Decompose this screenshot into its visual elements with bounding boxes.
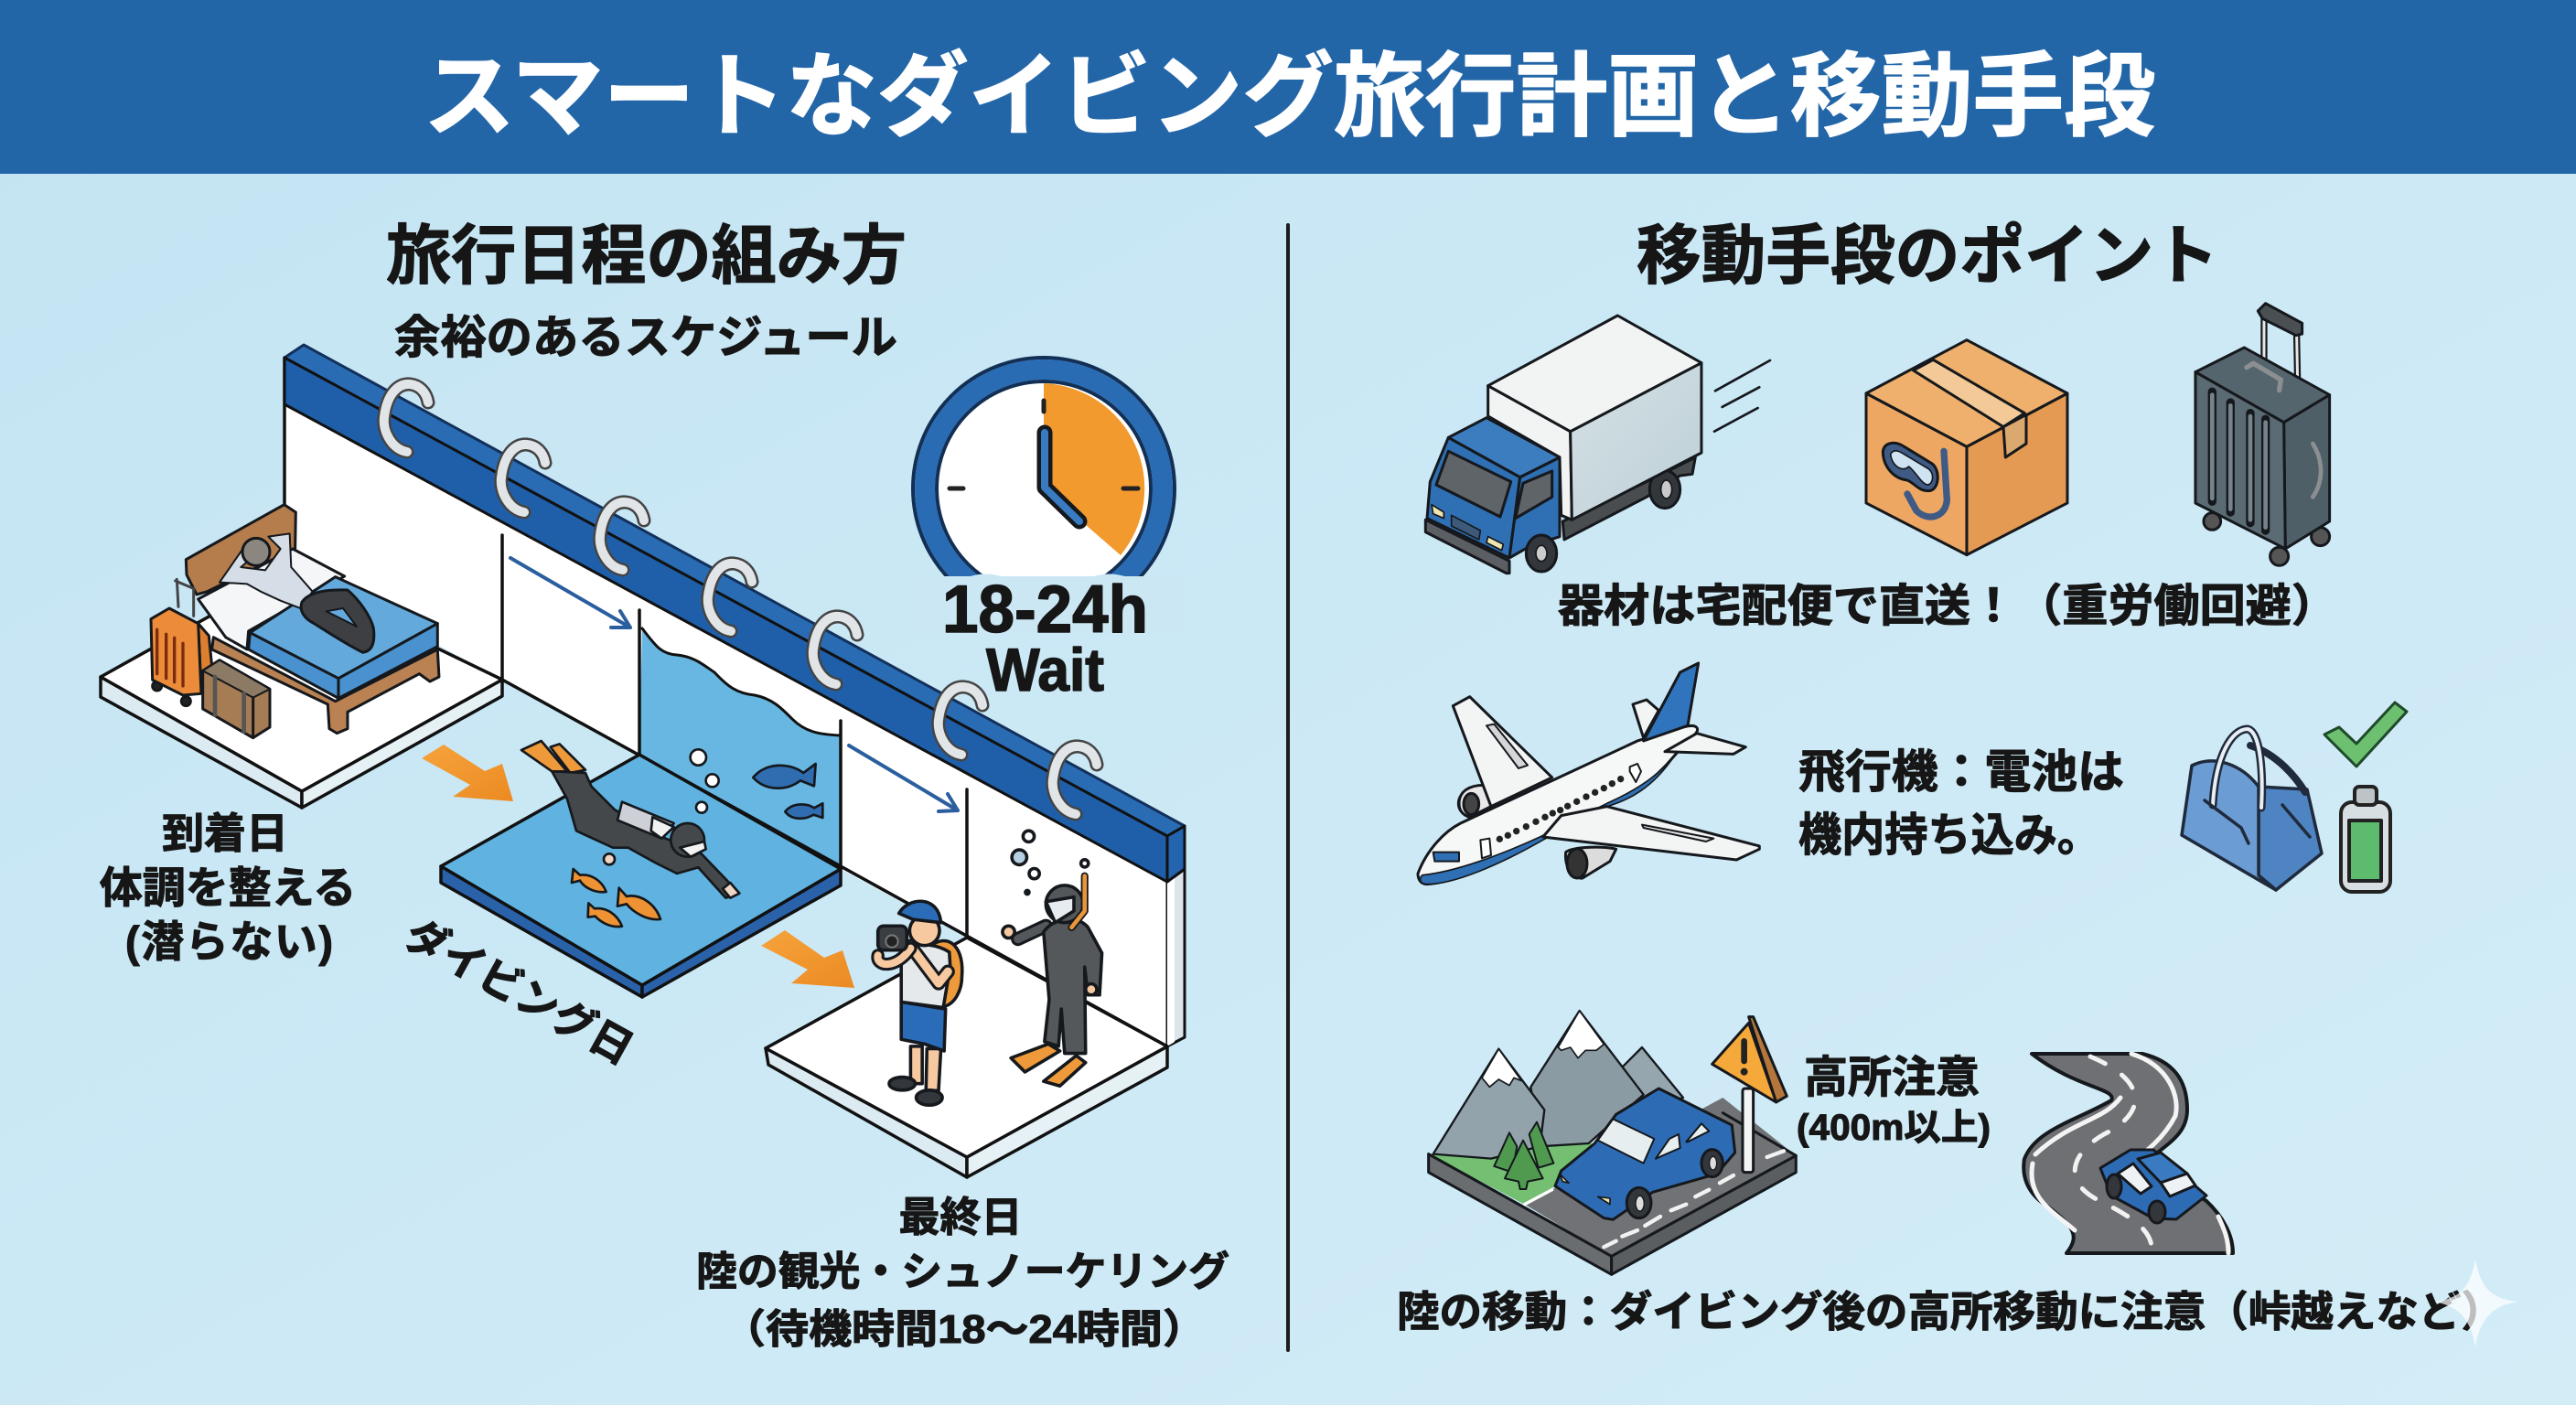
text: altitude caution: (400m以上) <box>1797 1108 1991 1148</box>
panel: arrival day platform <box>101 505 502 808</box>
panel: final day platform <box>766 831 1167 1177</box>
title banner <box>0 0 2576 174</box>
text: altitude caution <box>1797 1054 1991 1148</box>
snorkeler <box>1003 831 1102 1086</box>
icon: winding road with car <box>2023 1054 2233 1253</box>
text: land travel caution: 陸の移動：ダイビング後の高所移動に注意（峠越えなど） <box>1397 1288 2504 1335</box>
pine trees <box>1494 1122 1553 1189</box>
title banner: スマートなダイビング旅行計画と移動手段 <box>424 46 2155 148</box>
binder rings <box>384 384 1097 814</box>
icon: mountain road scene with warning sign <box>1429 1011 1796 1274</box>
icon: cardboard box with mask <box>1866 340 2067 555</box>
calendar binder band <box>284 345 1185 836</box>
water wall <box>639 628 841 869</box>
photographer and snorkeler <box>877 831 1102 1105</box>
text: arrival day: 体調を整える <box>100 863 356 912</box>
heading: transport: 移動手段のポイント <box>1637 220 2218 293</box>
icon: check mark <box>2324 702 2407 767</box>
orange fish <box>572 869 660 927</box>
diver with fish and bubbles <box>521 741 822 927</box>
text: batteries in cabin <box>1798 746 2124 861</box>
orange arrow: diving to final day <box>761 930 854 988</box>
bubbles <box>691 749 719 813</box>
icon: clock showing 18-24h wait: 18-24h <box>942 573 1148 647</box>
text: batteries in cabin: 飛行機：電池は <box>1798 746 2124 798</box>
small blue car <box>2100 1150 2206 1223</box>
brown bag <box>203 660 270 738</box>
road dashes <box>1604 1151 1784 1247</box>
text: batteries in cabin: 機内持ち込み。 <box>1798 810 2100 861</box>
text: ship gear by courier: 器材は宅配便で直送！（重労働回避） <box>1558 582 2337 631</box>
text: final day: （待機時間18〜24時間） <box>723 1307 1206 1352</box>
text: final day <box>696 1194 1229 1352</box>
bed with resting person and luggage <box>151 505 439 738</box>
orange arrow: arrival to diving <box>422 745 513 801</box>
icon: airplane <box>1418 663 1759 885</box>
text: altitude caution: 高所注意 <box>1804 1054 1980 1102</box>
photographer <box>877 901 962 1105</box>
heading: itinerary: 旅行日程の組み方 <box>386 220 907 293</box>
text: arrival day: (潜らない) <box>125 917 333 966</box>
text: final day: 陸の観光・シュノーケリング <box>696 1249 1229 1294</box>
icon: suitcase <box>2195 304 2330 565</box>
icon: clock showing 18-24h wait: Wait <box>986 636 1104 703</box>
icon: sparkle watermark <box>2434 1260 2517 1346</box>
timeline arrows <box>510 558 958 811</box>
icon: battery <box>2341 787 2390 892</box>
warning sign <box>1712 1017 1787 1173</box>
text: final day: 最終日 <box>898 1194 1023 1240</box>
orange suitcase <box>151 579 212 706</box>
blue car <box>1555 1089 1735 1219</box>
icon: clock showing 18-24h wait <box>901 358 1185 703</box>
icon: carry-on bag <box>2182 729 2322 890</box>
subheading: relaxed schedule: 余裕のあるスケジュール <box>394 312 897 363</box>
icon: delivery truck <box>1425 316 1770 574</box>
panel: diving day platform <box>441 741 841 997</box>
blue fish <box>753 764 822 819</box>
label: diving day: ダイビング日 <box>397 909 641 1074</box>
text: arrival day: 到着日 <box>162 810 288 857</box>
text: arrival day <box>100 810 356 966</box>
panel: isometric calendar wall <box>284 345 1185 1046</box>
